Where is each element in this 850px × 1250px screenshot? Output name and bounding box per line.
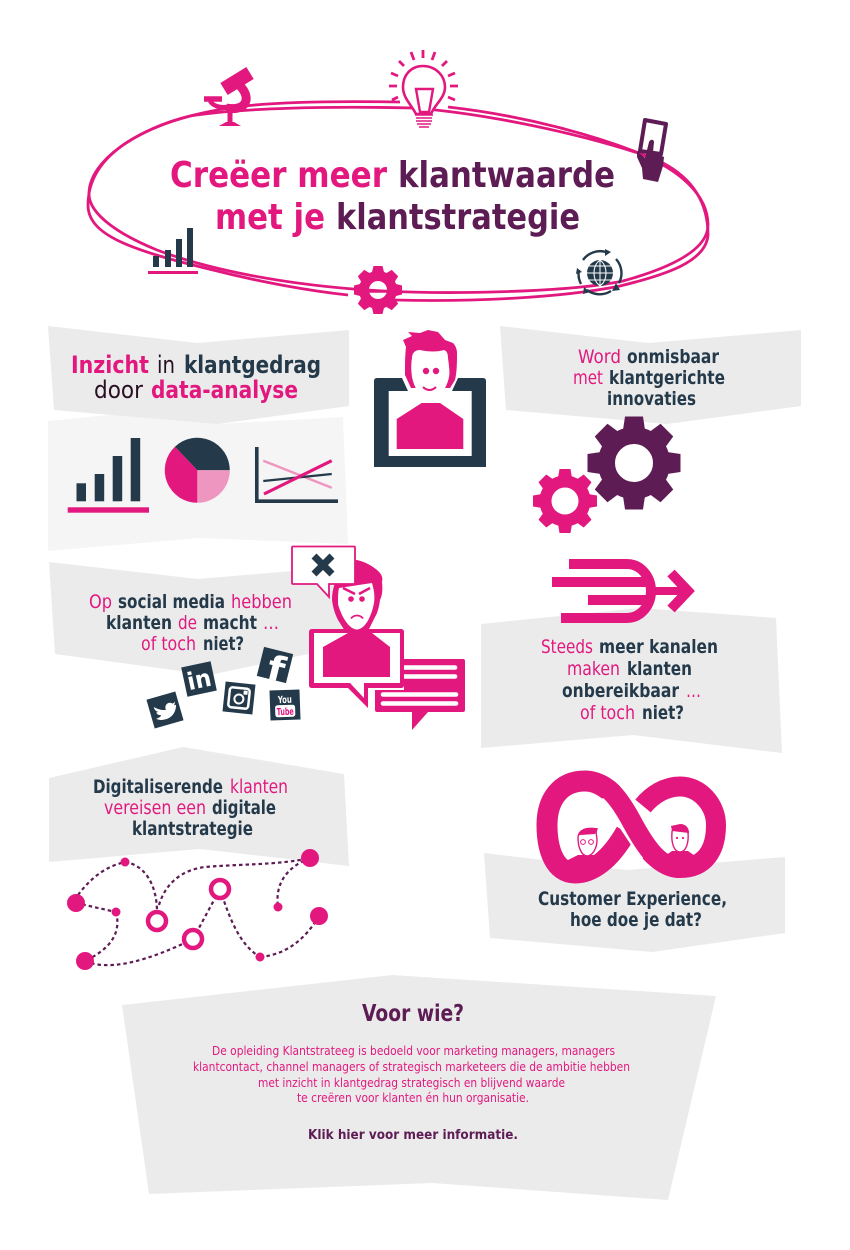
text: social media heading: de	[178, 612, 197, 634]
head	[332, 560, 382, 631]
heading: inzicht	[71, 351, 321, 404]
panel: header ellipse with icons	[88, 50, 708, 314]
text: kanalen heading: klanten	[627, 658, 692, 680]
icon: light bulb	[389, 50, 458, 127]
icon: angry customer with speech bubbles	[292, 546, 465, 730]
icon: person in frame	[374, 330, 486, 467]
panel: data-analyse charts background	[48, 411, 348, 551]
panel: social media	[49, 562, 350, 675]
title: klantwaarde	[398, 155, 615, 196]
first bubble with bust	[309, 629, 404, 708]
icon: youtube: You	[277, 695, 292, 706]
text: kanalen heading: …	[686, 680, 701, 702]
title: met je	[215, 197, 325, 238]
icon: youtube	[269, 689, 301, 721]
text: customer experience heading: hoe doe je dat?	[570, 909, 702, 931]
icon: gear small	[354, 266, 402, 314]
text: social media heading	[89, 591, 292, 655]
icon: gears	[533, 416, 680, 533]
text: kanalen heading: meer kanalen	[599, 636, 718, 658]
text: innovaties heading: met	[573, 367, 603, 389]
icon: facebook	[255, 646, 293, 692]
text: social media heading: macht	[203, 612, 257, 634]
text: social media heading: Op	[89, 591, 112, 613]
panel: customer experience	[484, 853, 785, 952]
title: Creëer meer	[170, 155, 387, 196]
text: customer experience heading: Customer Experience,	[538, 888, 727, 910]
pie chart	[165, 438, 230, 503]
icon: microscope	[204, 73, 250, 126]
text: social media heading: klanten	[106, 612, 172, 634]
text: kanalen heading: niet?	[642, 702, 684, 724]
text: kanalen heading: onbereikbaar	[562, 680, 680, 702]
text: kanalen heading: of toch	[580, 702, 635, 724]
text: social media heading: hebben	[231, 591, 292, 613]
title: klantstrategie	[336, 197, 580, 238]
icon: globe	[576, 249, 621, 294]
icon: bar chart small	[148, 228, 198, 274]
bar chart	[68, 438, 149, 513]
text: innovaties heading	[573, 346, 725, 410]
line chart	[257, 447, 338, 501]
text: social media heading: social media	[118, 591, 225, 613]
panel: steeds meer kanalen	[481, 608, 782, 753]
customer with glasses	[568, 828, 603, 870]
second bubble	[375, 659, 465, 730]
panel: voor wie	[122, 975, 716, 1200]
heading: inzicht: data-analyse	[151, 376, 298, 404]
text: social media heading: …	[263, 612, 279, 634]
panel: word onmisbaar	[500, 326, 801, 424]
text: customer experience heading	[538, 888, 727, 931]
text: digitale heading: klanten	[230, 777, 288, 798]
ellipse strokes	[88, 102, 708, 300]
heading: inzicht: door	[94, 376, 143, 404]
network diagram	[67, 849, 328, 970]
text: innovaties heading: Word	[578, 346, 621, 368]
heading: voor wie: Voor wie?	[362, 1001, 464, 1027]
heading: inzicht: klantgedrag	[184, 351, 321, 379]
text: social media heading: of toch	[141, 633, 196, 655]
icon: instagram	[223, 682, 255, 714]
text: kanalen heading	[541, 636, 718, 724]
text block: description: De opleiding Klantstrateeg is bedoeld voor marketing managers, managers	[212, 1044, 615, 1058]
text block: description: klantcontact, channel managers of strategisch marketeers die de ambitie hebben	[193, 1060, 630, 1074]
title	[170, 155, 615, 238]
text: digitale heading: Digitaliserende	[93, 777, 223, 798]
text: call to action: Klik hier voor meer informatie.	[308, 1127, 518, 1143]
text: innovaties heading: innovaties	[607, 388, 696, 410]
text: kanalen heading: Steeds	[541, 636, 593, 658]
icon: hand on tablet	[637, 120, 666, 182]
text: digitale heading	[93, 777, 288, 840]
icon: infinity with two customers	[547, 781, 716, 873]
icon: youtube: Tube	[277, 707, 294, 718]
icon: channels arrow	[552, 564, 688, 618]
icon: facebook: f	[263, 648, 290, 691]
heading: inzicht: Inzicht	[71, 351, 149, 379]
panel: digitaliserende klanten	[49, 747, 349, 866]
text block: description: te creëren voor klanten én hun organisatie.	[297, 1091, 529, 1105]
text block: description	[193, 1044, 630, 1105]
text block: description: met inzicht in klantgedrag strategisch en blijvend waarde	[258, 1076, 565, 1090]
icon: linkedin: in	[185, 664, 214, 696]
text: innovaties heading: onmisbaar	[627, 346, 720, 368]
text: social media heading: niet?	[203, 633, 244, 655]
heading: inzicht: in	[157, 351, 175, 379]
text: digitale heading: klantstrategie	[132, 819, 253, 840]
panel: inzicht in klantgedrag	[48, 326, 349, 424]
text: digitale heading: digitale	[212, 798, 276, 819]
icon: twitter	[146, 691, 184, 729]
customer without glasses	[662, 824, 698, 866]
text: innovaties heading: klantgerichte	[609, 367, 725, 389]
x bubble	[292, 546, 355, 597]
text: digitale heading: vereisen een	[104, 798, 206, 819]
text: kanalen heading: maken	[567, 658, 620, 680]
